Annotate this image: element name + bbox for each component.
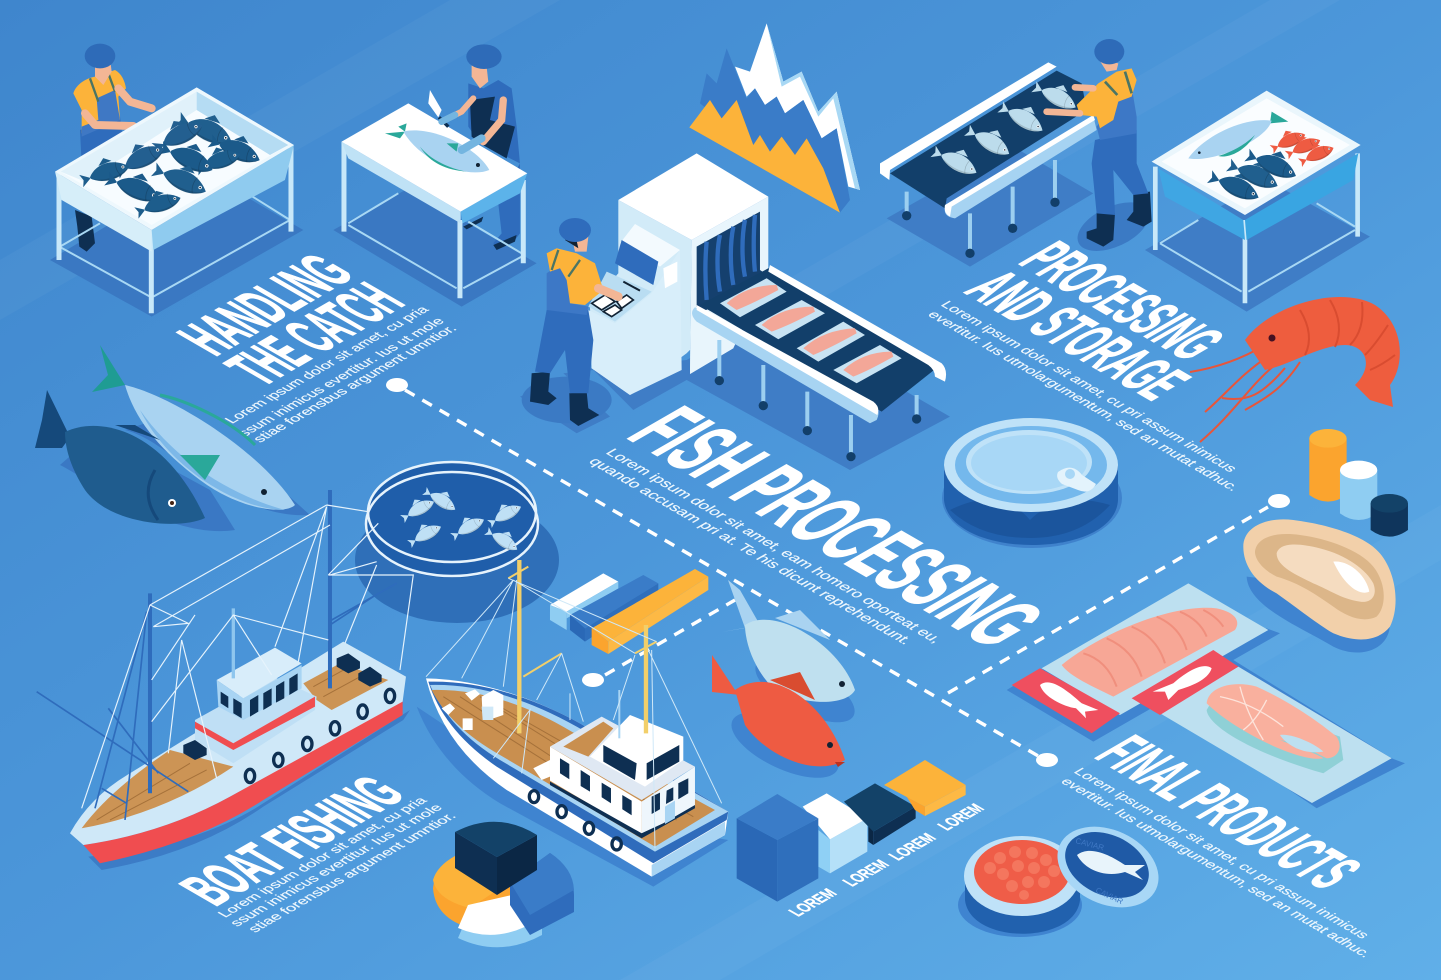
- labels: cube bar captions: LOREM: [838, 857, 894, 889]
- cutting table with legs: [342, 103, 527, 298]
- title: handling the catch: HANDLING: [162, 245, 369, 365]
- panel: packaged fillets: [1007, 583, 1405, 808]
- table shadows: [50, 170, 537, 317]
- salmon steak pack: [1160, 667, 1392, 803]
- salmon trays on conveyor: [720, 278, 902, 383]
- dashed connector: boat to bars: [582, 600, 735, 687]
- pack shadows: [1007, 628, 1405, 808]
- deck planks: [82, 663, 388, 828]
- title: processing and storage: AND STORAGE: [950, 261, 1205, 409]
- title: fish processing: FISH PROCESSING: [607, 394, 1066, 660]
- worker four at conveyor: [1047, 39, 1156, 261]
- icon: pie chart: [433, 822, 574, 947]
- title: handling the catch: [162, 245, 420, 395]
- hull: [426, 678, 728, 877]
- icon: shrimp: [1190, 297, 1400, 442]
- worker one at basin table: [73, 44, 152, 252]
- pile of dark fish: [77, 103, 266, 220]
- worker two body and legs: [463, 44, 520, 250]
- text: boat fishing body: Lorem ipsum dolor sit amet, cu pria: [214, 794, 430, 920]
- fish on conveyor: [930, 74, 1082, 179]
- conveyor belt: [692, 265, 946, 423]
- mountain area chart: [689, 23, 860, 213]
- text: final products body: Lorem ipsum dolor sit amet, cu pri assum inimicus: [1070, 765, 1374, 941]
- dashed connector: products to top right dot: [948, 494, 1290, 693]
- red fish label one: [1012, 668, 1120, 733]
- icon: caviar tin lid: [1044, 811, 1172, 923]
- text: final products body: evertitur. Ius utmolargumentum, sed an mutat adhuc.: [1057, 775, 1376, 960]
- icon: tin can: [942, 418, 1122, 548]
- icon: reference fish: [712, 580, 864, 791]
- ship cabin: [195, 648, 317, 763]
- ice table with fish: [1152, 91, 1361, 303]
- icon: caviar tin lid: CAVIAR: [1094, 886, 1125, 906]
- panel: central processing machine: [520, 23, 950, 470]
- icon: caviar tin: [958, 836, 1082, 937]
- labels: cube bar captions: LOREM: [784, 886, 841, 919]
- dashed connector: left dot to final products: [386, 378, 1058, 767]
- icon: caviar tin lid: CAVIAR: [1074, 836, 1105, 853]
- fish on cutting table: [385, 123, 489, 172]
- worker three at console: [522, 218, 618, 426]
- text: processing and storage body: Lorem ipsum dolor sit amet, cu pri assum inimicus: [937, 298, 1241, 474]
- shadow: [417, 707, 728, 887]
- text: boat fishing body: ssum inimicus evertitur. Ius ut mole: [226, 801, 446, 929]
- conveyor legs: [715, 340, 921, 461]
- icon: cylinder bars: [1309, 429, 1408, 537]
- text: handling the catch body: Lorem ipsum dolor sit amet, cu pria: [221, 303, 432, 426]
- panel: fish boat two: [417, 560, 728, 887]
- text: processing and storage body: evertitur. Ius utmolargumentum, sed an mutat adhuc.: [924, 308, 1244, 493]
- life rings and crates: [183, 653, 395, 783]
- control console: [588, 224, 682, 395]
- conveyor shadow: [520, 313, 950, 470]
- life rings and deck boxes: [442, 689, 621, 850]
- text: handling the catch body: ssum inimicus evertitur. Ius ut mole: [234, 315, 448, 439]
- deck planks: [430, 685, 728, 852]
- panel: processing and storage illustration: [880, 39, 1370, 312]
- text: handling the catch body: stiae forensbus argument umntior.: [249, 322, 460, 445]
- fish conveyor: [880, 62, 1097, 258]
- ship superstructure: [550, 715, 695, 838]
- conveyor and table shadows: [887, 147, 1370, 312]
- labels: cube bar captions: LOREM: [884, 830, 940, 863]
- panel: handling the catch illustration: [50, 44, 537, 317]
- text: boat fishing body: stiae forensbus argument umntior.: [244, 810, 459, 935]
- icon: 3d bars: [550, 569, 708, 654]
- masts and rigging: [426, 560, 722, 848]
- basin table with legs: [55, 87, 294, 313]
- machine cabinet: [590, 153, 770, 395]
- labels: cube bar captions: LOREM: [933, 801, 989, 833]
- chart: isometric cube bars: [737, 760, 966, 902]
- salmon fillet pack: [1042, 583, 1268, 715]
- text: fish processing body: quando accusam pri at. Te his dicunt reprehendunt.: [585, 455, 916, 647]
- red fish label two: [1132, 650, 1238, 715]
- title: handling the catch: THE CATCH: [210, 273, 420, 395]
- text: fish processing body: Lorem ipsum dolor sit amet, eam homero oporteat eu,: [602, 446, 946, 646]
- title: boat fishing: BOAT FISHING: [165, 767, 419, 914]
- labels: cube bar captions: [784, 801, 989, 919]
- panel: fish boat one: [37, 490, 413, 870]
- worker two arms and knife: [428, 90, 503, 150]
- masts and rigging: [37, 490, 413, 820]
- icon: left fish pair: [35, 345, 310, 531]
- hull: [70, 642, 410, 870]
- text: boat fishing body: [214, 794, 459, 935]
- icon: oyster shell: [1243, 519, 1396, 653]
- title: processing and storage: [950, 232, 1240, 409]
- panel: net pen with fish: [355, 462, 559, 623]
